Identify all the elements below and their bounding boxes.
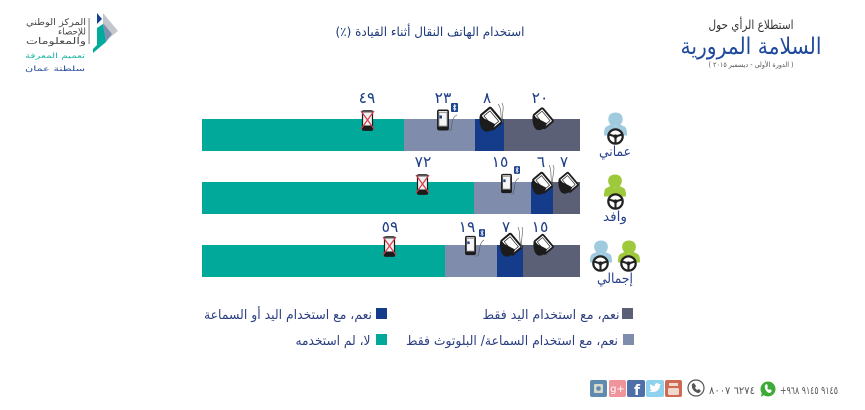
logo country: سلطنة عمان [25, 65, 85, 73]
label: عماني [599, 144, 631, 160]
icons [383, 227, 553, 257]
values: ٤٩ [359, 89, 375, 107]
icons [361, 103, 553, 132]
logo name [26, 18, 86, 47]
values: ١٥ [532, 218, 548, 236]
icon: instagram [590, 380, 607, 397]
phone number: ٨٠٠٧ ٦٢٧٤ [709, 385, 755, 397]
legend: headset only: نعم، مع استخدام السماعة/ البلوتوث فقط [406, 334, 618, 349]
values: ٧ [502, 218, 510, 236]
values: ١٥ [492, 153, 508, 171]
chart: stacked bars [202, 89, 640, 287]
values: ٢٠ [532, 89, 548, 107]
whatsapp number: +٩٦٨ ٩١٤٥ ٩١٤٥ [780, 385, 838, 397]
logo name: للإحصاء [58, 28, 86, 38]
legend: no: لا، لم استخدمه [296, 334, 370, 349]
label: إجمالي [597, 271, 633, 287]
values [415, 153, 568, 171]
driver icon [604, 112, 627, 144]
values: ١٩ [459, 218, 475, 236]
driver icons [590, 240, 640, 271]
icon: whatsapp [760, 382, 776, 397]
values: ٧٢ [415, 153, 431, 171]
logo mark [93, 13, 118, 53]
icon: twitter [646, 380, 664, 397]
row: Total [202, 218, 640, 287]
legend [204, 306, 634, 349]
icons [416, 165, 578, 195]
logo divider [88, 18, 90, 44]
row: Omani [202, 89, 631, 160]
icon: facebook: f [634, 383, 641, 399]
legend: hand or headset: نعم، مع استخدام اليد أو السماعة [204, 306, 372, 323]
icon: facebook [627, 380, 645, 399]
logo slogan: تعميم المعرفة [25, 52, 85, 60]
values: ٢٣ [435, 89, 451, 107]
values: ٧ [560, 153, 568, 171]
legend: hand only: نعم، مع استخدام اليد فقط [482, 308, 620, 323]
title: overline: استطلاع الرأي حول [708, 16, 794, 33]
logo [25, 13, 118, 73]
title: date: ( الدورة الأولى - ديسمبر ٢٠١٥ ) [708, 60, 794, 69]
label: وافد [603, 209, 627, 225]
bar segments [202, 119, 580, 151]
title block [680, 16, 822, 69]
logo name: المركز الوطني [26, 18, 86, 28]
bar segments [202, 245, 580, 277]
values: ٨ [483, 89, 491, 107]
row: Expat [202, 153, 627, 225]
values [359, 89, 548, 107]
driver icon [604, 174, 626, 209]
icon: google plus: g+ [610, 384, 625, 395]
values [382, 218, 548, 236]
icon: google plus [609, 380, 626, 397]
icon: telephone [688, 380, 704, 396]
title: main: السلامة المرورية [680, 34, 822, 60]
icon: youtube [665, 380, 682, 397]
values: ٥٩ [382, 218, 398, 236]
logo name: والمعلومات [26, 37, 86, 47]
values: ٦ [537, 153, 545, 171]
footer contacts [590, 380, 838, 399]
chart heading: استخدام الهاتف النقال أثناء القيادة (٪) [336, 23, 524, 40]
bar segments [202, 182, 580, 214]
